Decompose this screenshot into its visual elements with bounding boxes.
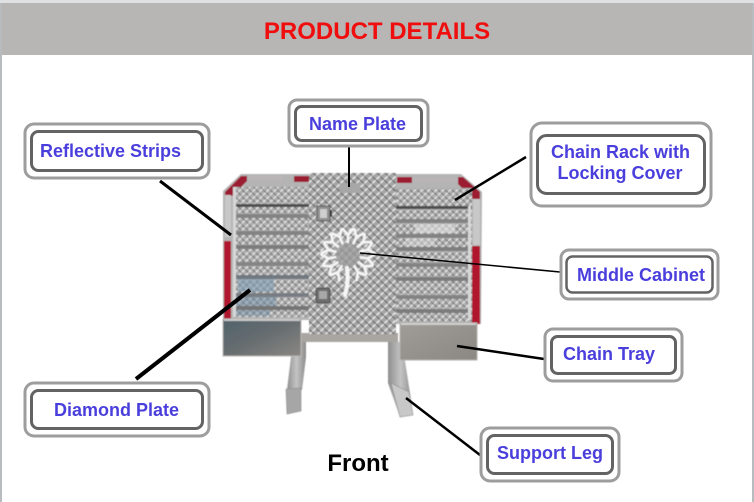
callout: middle cabinet	[561, 250, 718, 299]
chain trays	[223, 319, 477, 360]
dandelion logo	[322, 229, 374, 295]
callout: diamond plate	[25, 383, 209, 436]
name plate	[340, 183, 360, 193]
callout: chain rack with locking cover: Chain Rack with	[551, 142, 690, 162]
crossbar	[300, 333, 398, 342]
callout: middle cabinet: Middle Cabinet	[577, 265, 705, 285]
callout: support leg	[481, 428, 619, 481]
right slats	[396, 188, 472, 322]
leader line: name plate	[348, 147, 350, 187]
left slats	[233, 187, 309, 317]
leader line: support leg	[406, 398, 480, 455]
lower latch	[316, 288, 330, 303]
outer frame with red reflective strips	[223, 174, 482, 324]
callout: chain tray: Chain Tray	[563, 344, 655, 364]
callout: name plate	[289, 100, 428, 146]
view caption: front: Front	[327, 450, 389, 477]
middle cabinet	[309, 173, 396, 334]
leader line: reflective strips	[160, 181, 231, 235]
header band	[2, 3, 752, 55]
callout: chain rack with locking cover	[531, 123, 711, 206]
leader line: middle cabinet	[360, 253, 560, 272]
callout: diamond plate: Diamond Plate	[54, 400, 179, 420]
support legs	[286, 340, 413, 417]
title: PRODUCT DETAILS	[264, 18, 490, 45]
upper latch	[317, 206, 332, 221]
callout: support leg: Support Leg	[497, 443, 603, 463]
product photo: headache rack, front view	[223, 173, 482, 417]
callout: chain tray	[545, 329, 682, 381]
callout: name plate: Name Plate	[309, 114, 406, 134]
leader line: diamond plate	[136, 290, 250, 379]
leader line: chain rack	[455, 157, 526, 200]
leader line: chain tray	[457, 346, 544, 359]
callout: chain rack with locking cover: Locking Cover	[557, 163, 683, 183]
callout: reflective strips	[25, 124, 209, 178]
callout: reflective strips: Reflective Strips	[40, 141, 181, 161]
